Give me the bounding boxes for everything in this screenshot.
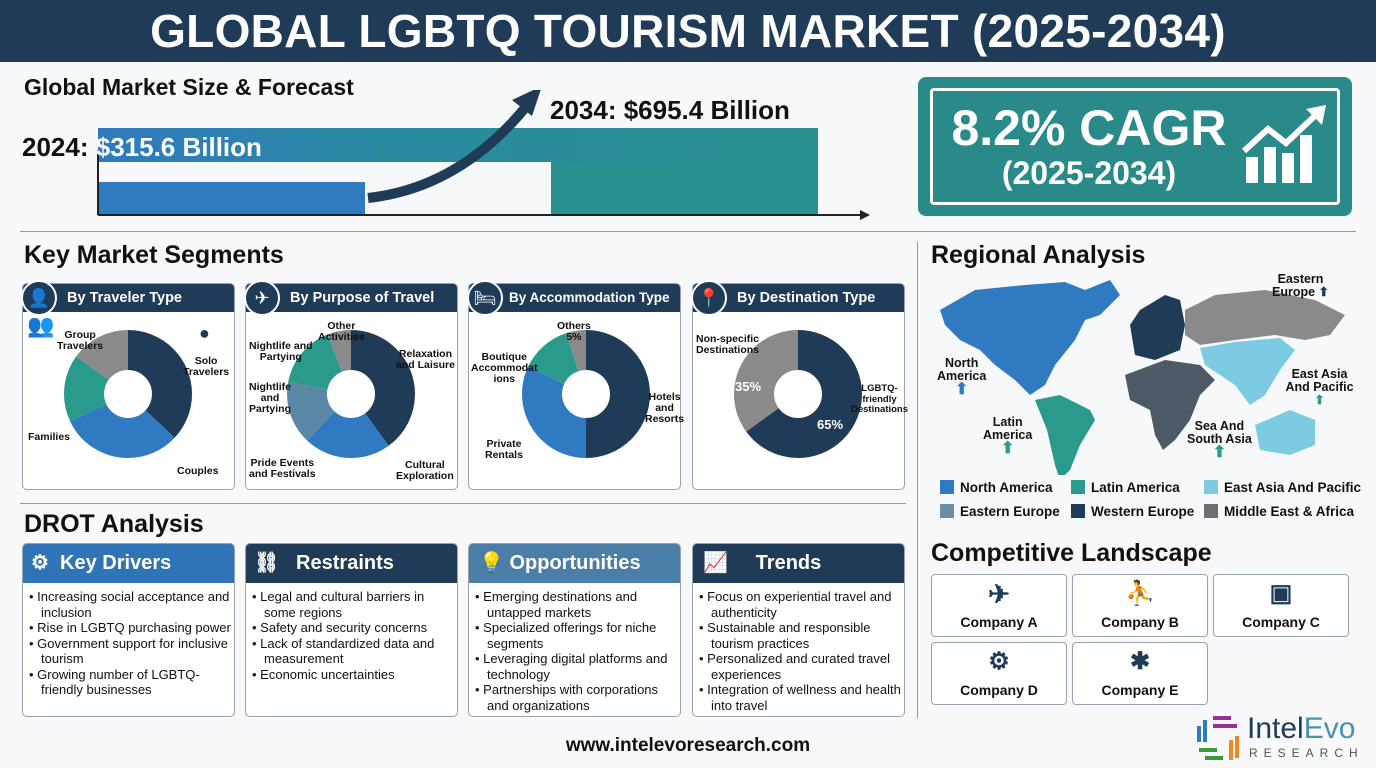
panel: by traveler type: By Traveler Type	[67, 290, 182, 306]
panel: key drivers: Increasing social acceptance and inclusion	[37, 589, 229, 620]
title banner: GLOBAL LGBTQ TOURISM MARKET (2025-2034)	[150, 5, 1226, 57]
panel: by accommodation type: and	[655, 402, 674, 414]
panel: by accommodation type	[468, 283, 681, 490]
panel: trends: 📈 Trends	[703, 552, 821, 574]
panel: by purpose of travel: Activities	[318, 331, 365, 343]
panel: trends: Sustainable and responsible tourism practices	[707, 620, 871, 650]
legend: Western Europe	[1091, 504, 1194, 519]
label 2024: 2024: $315.6 Billion	[22, 132, 262, 162]
bar chart: market forecast	[22, 90, 870, 220]
map: world regions: Sea And	[1195, 419, 1244, 433]
panel: restraints: Economic uncertainties	[260, 666, 395, 682]
panel: opportunities	[468, 543, 681, 717]
panel: restraints: Legal and cultural barriers in some regions	[260, 589, 424, 620]
panel: by purpose of travel: Relaxation	[399, 348, 452, 360]
legend: Eastern Europe	[960, 504, 1060, 519]
panel: by purpose of travel	[245, 283, 458, 490]
title banner	[0, 0, 1376, 62]
panel: by accommodation type: 5%	[566, 331, 582, 343]
panel: by accommodation type: Resorts	[645, 413, 684, 425]
heading: market size: Global Market Size & Forecast	[24, 74, 354, 100]
panel: by purpose of travel: Partying	[260, 351, 302, 363]
panel: by accommodation type: Accommodat	[471, 362, 538, 374]
icon: growth chart	[1242, 105, 1326, 183]
text: Company C	[1242, 614, 1320, 630]
panel: restraints	[245, 543, 458, 717]
text: Company B	[1101, 614, 1179, 630]
panel: by accommodation type: Rentals	[485, 449, 523, 461]
map: world regions: And Pacific ⬆	[1285, 380, 1354, 407]
panel: key drivers: Government support for inclusive tourism	[37, 636, 228, 666]
panel: by accommodation type: By Accommodation Type	[509, 290, 670, 305]
region labels: North	[945, 356, 978, 370]
panel: key drivers: Rise in LGBTQ purchasing power	[37, 620, 231, 635]
heading: regional analysis: Regional Analysis	[931, 241, 1145, 269]
panel: opportunities: Partnerships with corporations and organizations	[483, 682, 658, 712]
panel: by destination type	[692, 283, 905, 490]
panel: by traveler type: ●	[199, 323, 210, 343]
panel: by purpose of travel: Other	[327, 320, 355, 332]
panel: by purpose of travel: ✈	[254, 288, 270, 308]
panel: by purpose of travel: Exploration	[396, 470, 454, 482]
heading: DROT analysis: DROT Analysis	[24, 510, 204, 538]
panel: restraints: Lack of standardized data and measurement	[260, 636, 434, 666]
panel: by destination type: Destinations	[851, 404, 908, 415]
panel: key drivers: ⚙ Key Drivers	[31, 552, 171, 574]
panel: by destination type: 65%	[817, 417, 843, 432]
panel: by purpose of travel: Pride Events	[250, 457, 314, 469]
logo	[1197, 712, 1364, 760]
legend: Middle East & Africa	[1224, 504, 1354, 519]
legend	[940, 480, 1361, 519]
panel: by purpose of travel: Partying	[249, 403, 291, 415]
CAGR box: (2025-2034)	[1002, 155, 1176, 191]
map: world regions: Europe ⬆	[1272, 285, 1329, 299]
panel: by purpose of travel: and Laisure	[396, 359, 455, 371]
text: ⚙	[988, 648, 1010, 675]
footer website: www.intelevoresearch.com	[566, 735, 810, 756]
panel: by destination type: 📍	[698, 288, 720, 308]
map: world regions: America	[983, 428, 1032, 442]
map: world regions: ⬆	[1001, 440, 1014, 457]
text: ▣	[1270, 580, 1292, 607]
panel: restraints: ⛓ Restraints	[254, 552, 394, 574]
panel: by destination type: friendly	[862, 394, 897, 404]
panel: by accommodation type: Boutique	[482, 351, 527, 363]
map: world regions: South Asia	[1187, 432, 1252, 446]
panel: restraints: Safety and security concerns	[260, 620, 427, 635]
panel: key drivers: Growing number of LGBTQ-friendly businesses	[37, 666, 200, 697]
panel: by purpose of travel: Nightlife and	[249, 340, 313, 352]
heading: competitive landscape: Competitive Landscape	[931, 539, 1212, 567]
text: Company D	[960, 682, 1038, 698]
logo: IntelEvo	[1247, 712, 1355, 745]
panel: opportunities: Emerging destinations and untapped markets	[483, 589, 637, 620]
panel: by traveler type: Group	[64, 329, 96, 341]
region labels: ⬆	[955, 381, 968, 398]
CAGR box: 8.2% CAGR	[951, 100, 1227, 156]
panel: by traveler type: Couples	[177, 465, 218, 477]
panel: opportunities: Specialized offerings for niche segments	[483, 620, 656, 650]
company cards	[931, 574, 1067, 637]
panel: by accommodation type: Private	[486, 438, 521, 450]
panel: by destination type: By Destination Type	[737, 290, 875, 306]
panel: by traveler type: Families	[28, 431, 70, 443]
panel: by traveler type: Travelers	[183, 366, 229, 378]
panel: by purpose of travel: and	[261, 392, 279, 404]
panel: by accommodation type: 🛏	[474, 288, 496, 308]
panel: by destination type: LGBTQ-	[861, 383, 898, 394]
panel: opportunities: 💡 Opportunities	[479, 552, 641, 574]
map: world regions: ⬆	[1213, 444, 1226, 461]
panel: trends	[692, 543, 905, 717]
panel: by destination type: 35%	[735, 379, 761, 394]
panel: key drivers	[22, 543, 235, 717]
legend: North America	[960, 480, 1053, 495]
map: world regions: East Asia	[1292, 367, 1347, 381]
panel: trends: Focus on experiential travel and authenticity	[707, 589, 891, 620]
donut chart	[64, 330, 192, 458]
company cards: Company A	[960, 614, 1038, 630]
panel: trends: Personalized and curated travel experiences	[707, 651, 890, 682]
heading: key market segments: Key Market Segments	[24, 241, 284, 269]
panel: trends: Integration of wellness and health into travel	[707, 682, 901, 712]
panel: by accommodation type: Others	[557, 320, 591, 332]
company cards: ✈	[988, 579, 1010, 609]
panel: by traveler type: 👤	[28, 288, 50, 308]
text: ⛹	[1125, 580, 1155, 607]
legend: East Asia And Pacific	[1224, 480, 1361, 495]
map: world regions: Eastern	[1278, 272, 1323, 286]
panel: by traveler type	[22, 283, 235, 490]
text: Company E	[1101, 682, 1178, 698]
CAGR box	[918, 77, 1352, 216]
region labels	[937, 356, 986, 398]
panel: by purpose of travel: Nightlife	[249, 381, 291, 393]
text: ✱	[1130, 648, 1150, 675]
panel: by accommodation type: Hotels	[648, 391, 681, 403]
panel: by purpose of travel: Cultural	[405, 459, 445, 471]
map: world regions	[937, 272, 1354, 475]
legend: Latin America	[1091, 480, 1180, 495]
logo: RESEARCH	[1249, 746, 1364, 760]
map: world regions: Latin	[993, 415, 1023, 429]
region labels: America	[937, 369, 986, 383]
panel: by traveler type: Solo	[195, 355, 217, 367]
panel: by traveler type: Travelers	[57, 340, 103, 352]
panel: by traveler type: 👥	[27, 313, 54, 338]
panel: opportunities: Leveraging digital platforms and technology	[483, 651, 667, 682]
label 2034: 2034: $695.4 Billion	[550, 95, 790, 125]
panel: by purpose of travel: By Purpose of Travel	[290, 290, 434, 306]
panel: by accommodation type: ions	[493, 373, 515, 385]
panel: by destination type: Destinations	[696, 344, 759, 356]
panel: by purpose of travel: and Festivals	[249, 468, 316, 480]
panel: by destination type: Non-specific	[696, 333, 759, 345]
